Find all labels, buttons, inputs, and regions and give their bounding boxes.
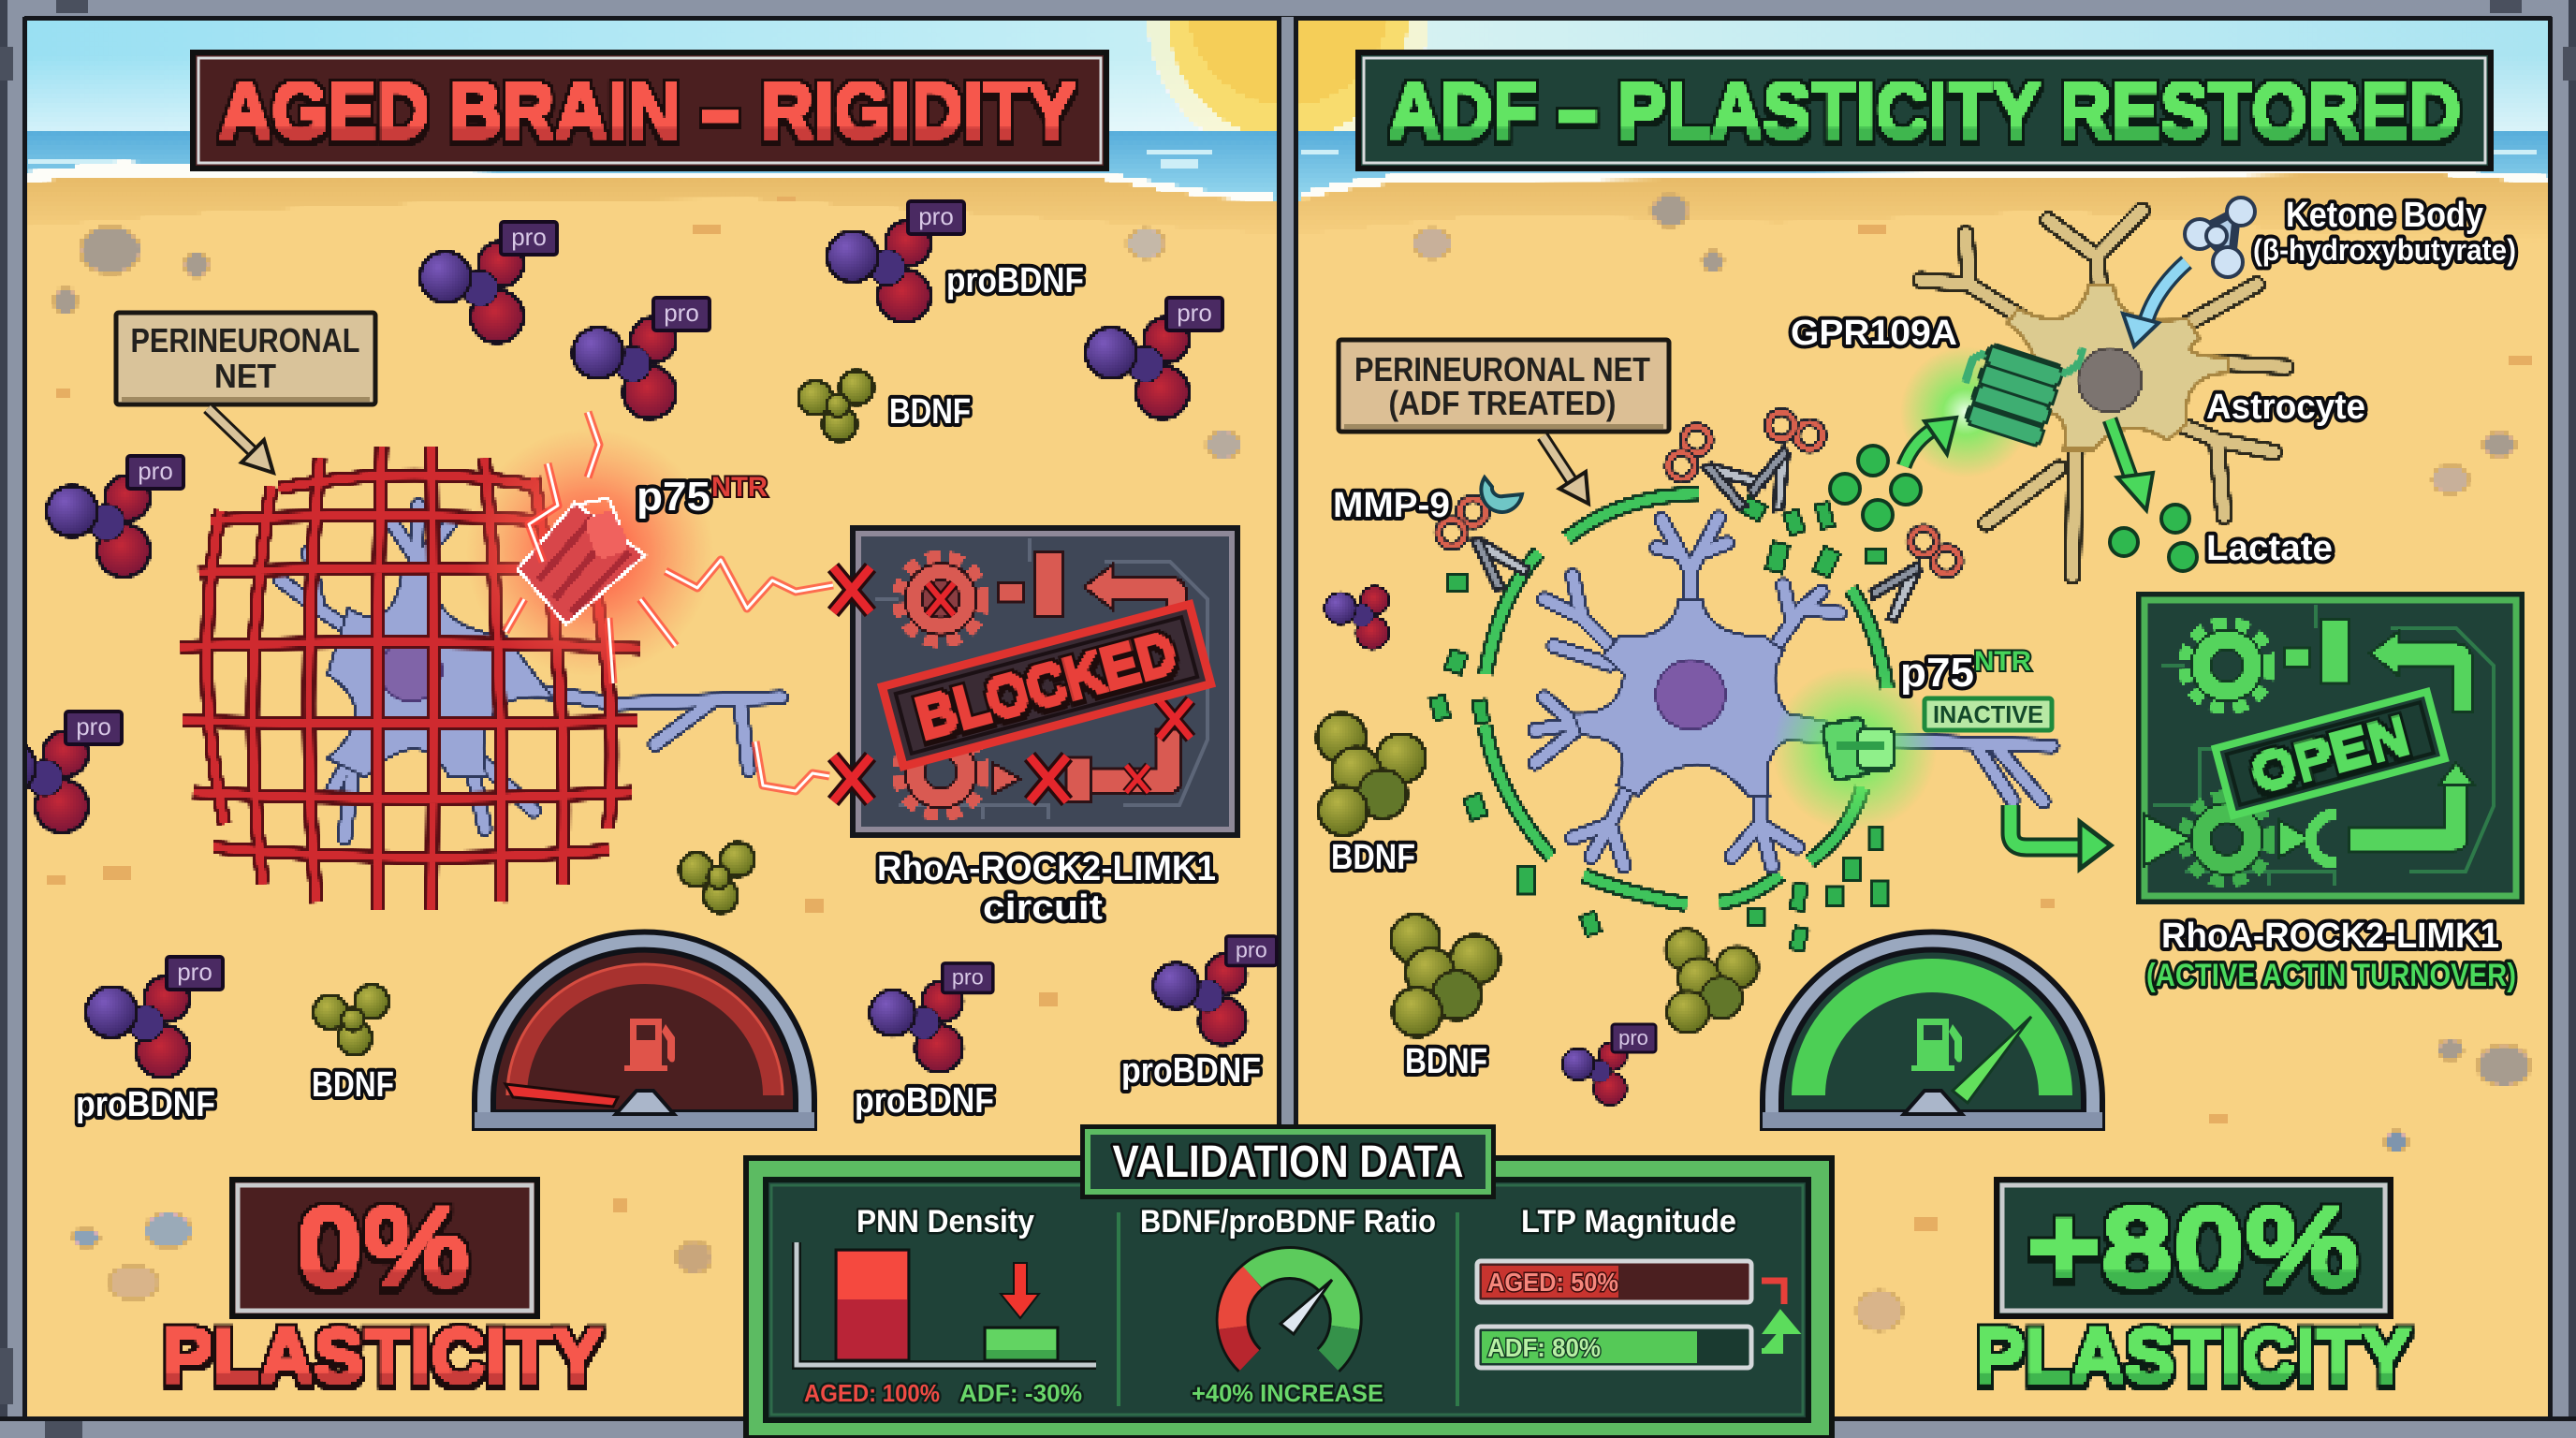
astrocyte label: Astrocyte [2206,388,2365,427]
sign: perineuronal net: PERINEURONAL [131,321,359,360]
callout: 0 percent [232,1180,537,1316]
fuel gauge: high [1763,932,2102,1128]
stamp: open: OPEN [2245,705,2416,803]
tag: inactive: INACTIVE [1933,700,2043,728]
sign: perineuronal net ADF [1339,340,1669,432]
p75NTR burst and receptor: NTR [711,472,768,503]
pro tag right panel [1612,1024,1656,1052]
chart: PNN density [797,1204,1096,1407]
small proBDNF molecules right panel [1325,586,1627,1105]
chart: PNN density: PNN Density [856,1204,1034,1240]
arrow: net sign to net [208,408,273,473]
ketone body molecule and arrow [2123,196,2516,346]
p75NTR inactive receptor with glow [1772,646,2052,831]
arrows: LTP increase [1762,1281,1784,1304]
degraded net arcs [1485,493,1887,904]
sign: perineuronal net ADF: PERINEURONAL NET [1354,350,1650,389]
heading: plasticity red: PLASTICITY [163,1313,603,1399]
pro tags left panel: pro [664,299,699,327]
BDNF molecules left panel [314,371,873,1055]
sign: perineuronal net ADF: (ADF TREATED) [1389,384,1616,422]
icon: fuel pump [1911,1019,1962,1071]
proBDNF molecules left panel [0,221,1246,1078]
GPR109A receptor and glow: GPR109A [1791,314,1957,353]
pro tags left panel: pro [138,457,173,485]
arrow: ADF sign to net [1543,436,1588,504]
p75NTR burst and receptor [466,412,833,791]
caption: circuit right: RhoA-ROCK2-LIMK1 [2161,917,2499,956]
p75NTR inactive receptor with glow: NTR [1974,646,2031,677]
BDNF labels right panel: BDNF [1405,1042,1487,1081]
lactate arrow, dots and label [2110,419,2333,571]
ketone body molecule and arrow: Ketone Body [2286,196,2483,235]
molecule labels left panel: BDNF [312,1065,394,1105]
molecule labels left panel: proBDNF [946,261,1084,301]
astrocyte [1921,211,2286,576]
pro tags left panel: pro [76,712,111,741]
molecule labels left panel: BDNF [889,392,971,432]
pro tags left panel [66,201,1277,992]
needle at high [1953,1017,2031,1103]
caption: circuit left: circuit [983,888,1103,928]
net fragments [1429,496,1887,951]
arrow: axon to open circuit [2011,805,2111,869]
BDNF labels right panel [1331,838,1487,1081]
neuron: ADF treated [1535,518,2052,866]
arrow: density drop [1001,1263,1039,1318]
chart: LTP magnitude [1477,1204,1795,1368]
p75NTR inactive receptor with glow: p75 [1900,650,1974,696]
fuel gauge: empty [475,932,814,1128]
pro tags left panel: pro [511,223,547,251]
icon: fuel pump [624,1019,675,1071]
molecule labels left panel: proBDNF [76,1085,215,1124]
circuit panel: blocked [833,528,1237,835]
chart: BDNF/proBDNF ratio gauge [1140,1204,1436,1407]
caption: circuit right: (ACTIVE ACTIN TURNOVER) [2146,958,2516,993]
heading: plasticity green: PLASTICITY [1975,1313,2411,1399]
neuron caged in net [281,506,781,838]
GPR109A receptor and glow [1791,314,2084,477]
pro tags left panel: pro [1236,937,1267,961]
caption: circuit left [877,849,1216,928]
pro tags left panel: pro [952,964,984,989]
BDNF clusters right panel [1317,713,1758,1036]
title: aged brain: AGED BRAIN – RIGIDITY [219,66,1076,154]
callout: +80 percent: +80% [2026,1184,2360,1310]
pro tags left panel: pro [1177,299,1212,327]
stamp: open [2216,692,2445,815]
stamp: blocked: BLOCKED [910,620,1183,752]
chart: LTP magnitude: ADF: 80% [1487,1333,1601,1362]
BDNF labels right panel: BDNF [1331,838,1415,877]
circuit panel: open [2139,594,2522,902]
sign: perineuronal net [116,313,375,404]
pro tags left panel: pro [918,202,954,230]
chart: PNN density: ADF: -30% [959,1379,1082,1407]
lactate arrow, dots and label: Lactate [2206,529,2333,568]
callout: 0 percent: 0% [296,1184,470,1310]
caption: circuit right [2146,917,2516,993]
p75NTR burst and receptor: p75 [637,474,710,520]
perineuronal net cage [181,448,640,909]
MMP-9 enzyme and label: MMP-9 [1333,486,1450,525]
title: ADF: ADF – PLASTICITY RESTORED [1388,66,2461,154]
molecule labels left panel: proBDNF [1121,1051,1261,1091]
heading: validation data tab: VALIDATION DATA [1112,1137,1464,1187]
scissors: MMP-9 [1433,408,1965,632]
rocks and sand specks [47,195,2531,1330]
chart: BDNF/proBDNF ratio gauge: +40% INCREASE [1192,1379,1383,1407]
caption: circuit left: RhoA-ROCK2-LIMK1 [877,849,1216,888]
molecule labels left panel: proBDNF [855,1081,994,1121]
MMP-9 enzyme and label [1333,477,1522,525]
sign: perineuronal net: NET [214,357,276,395]
chart: BDNF/proBDNF ratio gauge: BDNF/proBDNF Ratio [1140,1204,1436,1240]
chart: PNN density: AGED: 100% [804,1379,940,1407]
pro tags left panel: pro [177,958,212,986]
callout: +80 percent [1997,1180,2391,1316]
ketone body molecule and arrow: (β-hydroxybutyrate) [2253,233,2516,267]
chart: LTP magnitude: LTP Magnitude [1521,1204,1736,1240]
pro tag right panel: pro [1618,1026,1648,1049]
molecule labels left panel [76,261,1261,1124]
panel: validation data [746,1127,1832,1438]
heading: validation data tab [1083,1127,1493,1196]
green ketone-driven dots and arrow [1830,418,1956,530]
needle at zero [505,1084,618,1107]
chart: LTP magnitude: AGED: 50% [1487,1268,1618,1297]
